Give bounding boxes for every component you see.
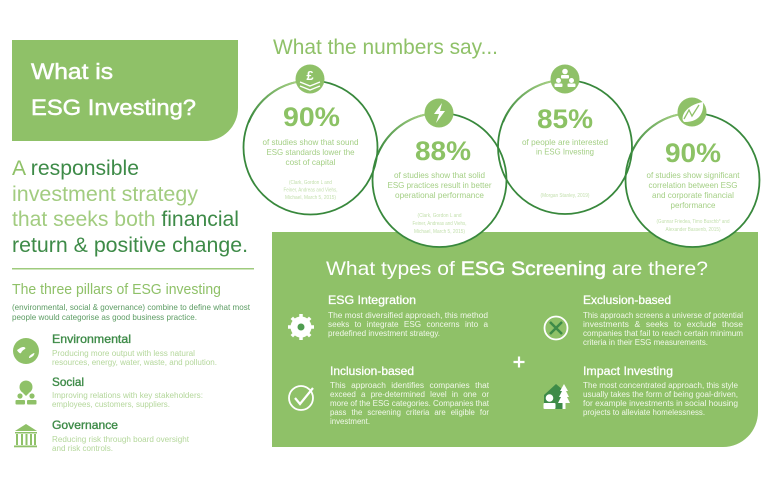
item: Exclusion-based: criteria in their ESG measurements. [583, 338, 708, 347]
stat: 88% operational performance: of studies show that solid [394, 170, 485, 180]
icon: lightning bolt [424, 98, 454, 128]
icon: gear [288, 314, 314, 340]
icon: house, tree and person [544, 384, 570, 409]
panel: ESG screening types [272, 232, 758, 447]
pillars intro text: (environmental, social & governance) combine to define what most [12, 302, 251, 312]
item: ESG Integration: seeks to integrate ESG concerns into a [328, 320, 489, 329]
stat: 90% corporate financial performance: performance [670, 200, 716, 210]
stat: 85% interested: of people are interested [522, 137, 608, 147]
stat: 90% corporate financial performance: correlation between ESG [648, 180, 738, 190]
item: Inclusion-based: pass the screening criteria are eligible for [330, 408, 489, 417]
icon: columned building [14, 424, 37, 447]
item: Exclusion-based: companies that fail to reach certain minimum [583, 329, 743, 338]
stat: 85% interested: (Morgan Stanley, 2019) [540, 193, 590, 199]
stat: 88% operational performance: Feiner, Andreas and Viehs, [412, 221, 466, 227]
stat: 90% cost of capital: Michael, March 5, 2015) [285, 195, 336, 201]
stat: 90% cost of capital: Feiner, Andreas and Viehs, [284, 188, 338, 194]
stat circles [244, 64, 760, 247]
item: ESG Integration: ESG Integration [328, 293, 416, 307]
pillars intro text: people would categorise as good business practice. [12, 312, 197, 322]
pillar: Environmental: resources, energy, water, waste, and pollution. [52, 358, 217, 367]
item: Inclusion-based: more of the ESG categories. Companies that [330, 399, 490, 408]
heading: three pillars: The three pillars of ESG investing [12, 281, 221, 298]
pillar: Environmental [13, 332, 217, 367]
item: Exclusion-based: investments & seeks to exclude those [583, 320, 744, 329]
stat: 90% cost of capital: cost of capital [286, 157, 336, 167]
stat: 90% corporate financial performance: of studies show significant [646, 170, 740, 180]
item: Impact Investing: for example investments in social housing [583, 399, 738, 408]
stat: 90% cost of capital [262, 64, 359, 201]
icon: leaf with chart line [678, 98, 706, 126]
stat: 88% operational performance: (Clark, Gordon L and [418, 213, 462, 219]
item: Inclusion-based: This approach identifies companies that [330, 381, 490, 390]
pillar: Social: Improving relations with key stakeholders: [52, 391, 203, 400]
definition statement: return & positive change. [12, 234, 248, 257]
item: Impact Investing: The most concentrated approach, this style [583, 381, 739, 390]
item: Inclusion-based: exceed a pre-determined level in one or [330, 390, 489, 399]
pillar: Governance: Reducing risk through board oversight [52, 435, 190, 444]
title panel: What is ESG Investing? [12, 40, 238, 141]
definition statement [12, 157, 248, 257]
stat: 88% operational performance: 88% [415, 136, 471, 166]
item: ESG Integration: The most diversified approach, this method [328, 311, 488, 320]
pillar: Environmental: Environmental [52, 332, 131, 346]
icon: check circle [289, 386, 313, 410]
pillar: Social [16, 375, 203, 409]
pillar: Environmental: Producing more output with less natural [52, 349, 195, 358]
stat: 88% operational performance: Michael, March 5, 2015) [414, 229, 465, 235]
stat: 90% corporate financial performance: (Gunnar Friedea, Timo Buschb* and [656, 219, 730, 225]
item: Impact Investing: usually takes the form of being goal-driven, [583, 390, 738, 399]
item: Impact Investing: projects to alleviate homelessness. [583, 408, 705, 417]
pillar: Social: Social [52, 375, 84, 389]
item: Impact Investing [544, 364, 739, 417]
stat: 90% cost of capital: of studies show that sound [262, 137, 359, 147]
icon: people hierarchy [550, 64, 580, 94]
item: Exclusion-based: Exclusion-based [583, 293, 671, 307]
icon: pound coin: £ [306, 68, 314, 83]
item: Inclusion-based [289, 364, 490, 426]
title panel: What is ESG Investing?: ESG Investing? [31, 95, 196, 120]
pillar: Social: employees, customers, suppliers. [52, 400, 170, 409]
item: Exclusion-based: This approach screens a universe of potential [583, 311, 743, 320]
pillar: Governance [14, 418, 190, 453]
item: ESG Integration: predefined investment strategy. [328, 329, 440, 338]
heading: screening types: What types of ESG Screening are there? [326, 258, 708, 280]
item: ESG Integration [288, 293, 489, 340]
item: Impact Investing: Impact Investing [583, 364, 673, 378]
heading: What the numbers say: What the numbers say... [273, 36, 498, 59]
pillar: Governance: and risk controls. [52, 444, 113, 453]
stat: 85% interested [522, 64, 608, 199]
item: Inclusion-based: Inclusion-based [330, 364, 414, 378]
definition statement: A responsible [12, 157, 139, 180]
icon: cross circle [544, 316, 568, 340]
pillars intro text [12, 302, 251, 322]
stat: 88% operational performance: operational performance [395, 190, 484, 200]
stat: 90% corporate financial performance: and corporate financial [652, 190, 734, 200]
icon: globe [13, 338, 39, 364]
item: Exclusion-based [544, 293, 744, 347]
stat: 90% cost of capital: (Clark, Gordon L and [289, 180, 332, 186]
icon: people [16, 380, 36, 404]
title panel: What is ESG Investing?: What is [31, 59, 113, 84]
stat: 90% cost of capital: 90% [283, 102, 340, 132]
stat: 85% interested: in ESG Investing [536, 146, 594, 156]
stat: 90% corporate financial performance [646, 98, 740, 233]
definition statement: that seeks both financial [12, 208, 239, 231]
icon: plus [514, 356, 524, 368]
stat: 90% corporate financial performance: Alexander Bassenb, 2015) [666, 227, 721, 233]
stat: 90% corporate financial performance: 90% [665, 138, 721, 168]
definition statement: investment strategy [12, 183, 198, 206]
stat: 88% operational performance: ESG practices result in better [388, 180, 492, 190]
stat: 88% operational performance [388, 98, 492, 235]
item: Inclusion-based: investment. [330, 417, 370, 426]
stat: 90% cost of capital: ESG standards lower the [266, 147, 355, 157]
stat: 85% interested: 85% [537, 104, 593, 134]
pillar: Governance: Governance [52, 418, 118, 432]
